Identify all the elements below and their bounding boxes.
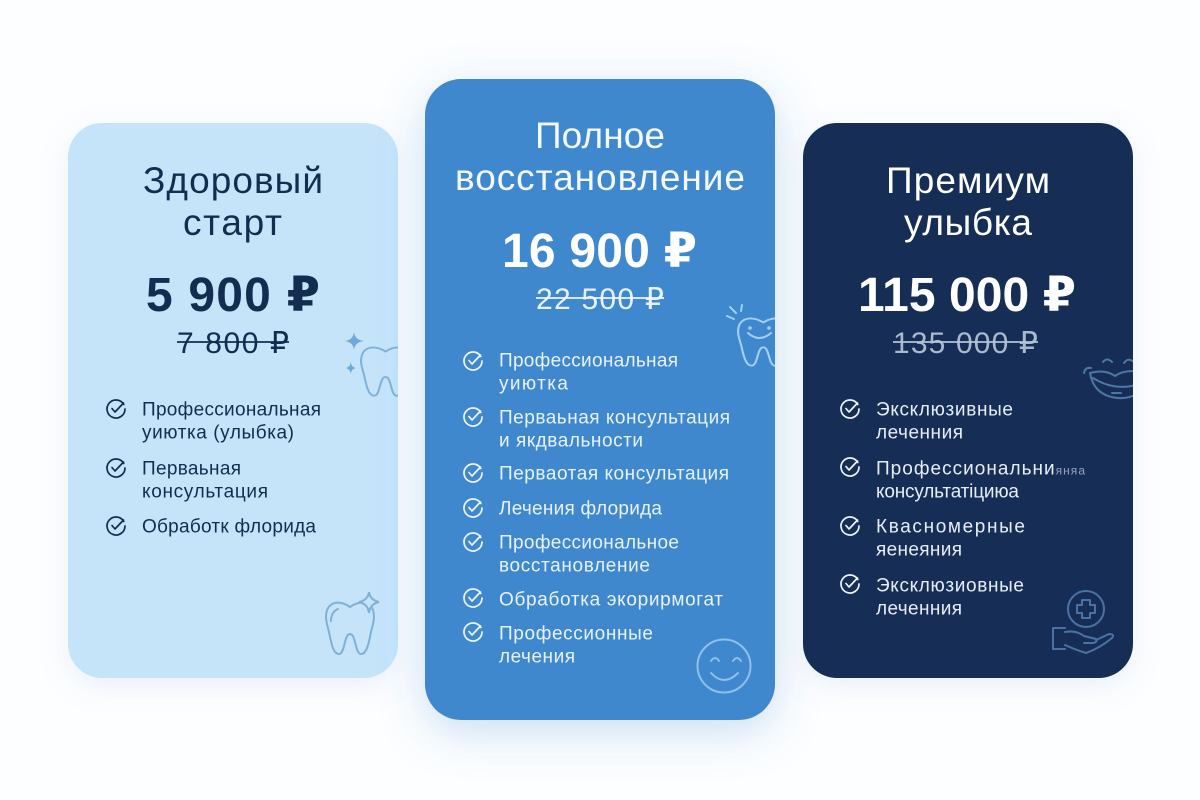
- heading: старт: [183, 202, 282, 243]
- old price: 7 800 ₽: [177, 327, 289, 360]
- feature list: [464, 350, 730, 668]
- feature list: Обработк флорида: [142, 516, 316, 538]
- card background: [68, 123, 398, 678]
- heading: Здоровый: [143, 160, 323, 201]
- price: 115 000 ₽: [858, 269, 1076, 322]
- icon: hand with medical cross: [1053, 591, 1113, 653]
- heading: [455, 115, 745, 198]
- price: 5 900 ₽: [146, 269, 320, 322]
- feature list: Лечения флорида: [499, 498, 662, 520]
- feature list: восстановление: [499, 556, 650, 576]
- feature list: Профессиональное: [499, 532, 679, 554]
- feature list: консультация: [142, 482, 268, 502]
- feature list: Обработка экорирмогат: [499, 590, 723, 610]
- feature list: уиютка (улыбка): [142, 422, 294, 444]
- feature list: Перваьная: [142, 458, 241, 480]
- feature list: [107, 400, 321, 538]
- feature list: Перваьная консультация: [499, 408, 730, 428]
- icon: tooth with sparkles: [345, 332, 398, 397]
- card background: [803, 123, 1133, 678]
- old price: 22 500 ₽: [536, 283, 664, 316]
- feature list: леченния: [876, 598, 962, 620]
- heading: [143, 160, 323, 243]
- feature list: Профессиональная: [142, 400, 321, 420]
- feature list: яенеяния: [876, 540, 962, 560]
- feature list: консультатіциюа: [876, 482, 1019, 502]
- heading: Премиум: [886, 160, 1050, 201]
- feature list: Профессионные: [499, 624, 653, 644]
- feature list: уиютка: [499, 374, 568, 394]
- heading: восстановление: [455, 157, 745, 198]
- icon: tooth with star: [326, 592, 379, 654]
- old price: 135 000 ₽: [893, 327, 1038, 360]
- icon: smiley face: [698, 640, 750, 692]
- panel: Премиум улыбка: [803, 123, 1140, 678]
- feature list: Профессиональнияняа: [876, 458, 1085, 480]
- feature list: [841, 400, 1085, 620]
- feature list: Профессиональная: [499, 350, 678, 372]
- feature list: Эксклюзивные: [876, 400, 1013, 420]
- price: 16 900 ₽: [502, 225, 697, 278]
- feature list: Перваотая консультация: [499, 464, 729, 484]
- panel: Здоровый старт: [68, 123, 410, 678]
- feature list: лечения: [499, 646, 575, 668]
- heading: улыбка: [904, 202, 1032, 243]
- feature list: и якдвальности: [499, 430, 643, 452]
- panel: Полное восстановление: [425, 79, 788, 720]
- icon: smile with teeth: [1084, 360, 1140, 398]
- heading: [886, 160, 1050, 243]
- heading: Полное: [535, 115, 665, 156]
- feature list: Квасномерные: [876, 516, 1025, 538]
- card background: [425, 79, 775, 720]
- icon: smiling tooth: [726, 304, 775, 367]
- feature list: Эксклюзиовные: [876, 576, 1024, 596]
- feature list: леченния: [876, 422, 963, 444]
